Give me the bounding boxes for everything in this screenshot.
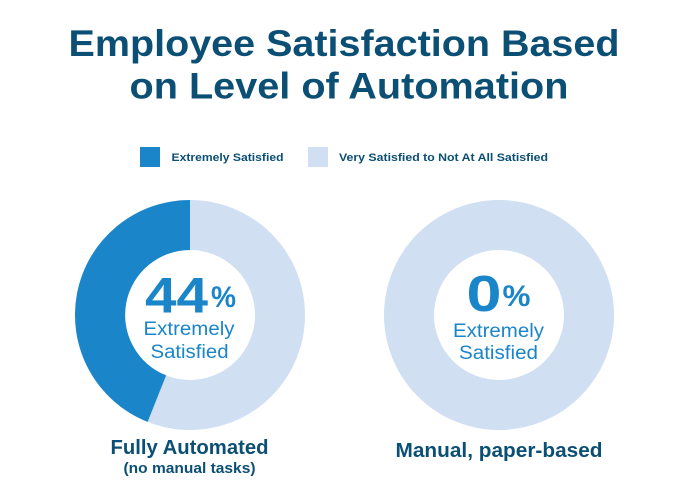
- donut chart: 0 percent: [409, 225, 589, 405]
- legend label: very satisfied to not at all satisfied: Very Satisfied to Not At All Satisfied: [339, 152, 548, 164]
- center label: [144, 319, 235, 363]
- center label: Extremely: [144, 319, 235, 340]
- title: [68, 23, 620, 106]
- value: 44%: 44: [145, 268, 208, 324]
- center label: Satisfied: [459, 343, 538, 364]
- panel: fully automated: [75, 200, 280, 477]
- legend swatch: very satisfied to not at all satisfied: [308, 147, 328, 167]
- legend: [140, 147, 548, 167]
- legend swatch: extremely satisfied: [140, 147, 160, 167]
- value: 0%: %: [502, 280, 530, 313]
- center label: Extremely: [453, 321, 545, 342]
- title: on Level of Automation: [130, 66, 568, 106]
- chart caption: Manual, paper-based: [396, 440, 602, 462]
- value: 0%: [466, 265, 530, 322]
- legend label: extremely satisfied: Extremely Satisfied: [172, 152, 284, 164]
- center label: Satisfied: [150, 342, 228, 363]
- donut chart: 44 percent: [75, 200, 280, 422]
- center label: [453, 321, 545, 364]
- value: 44%: %: [211, 281, 236, 314]
- value: 0%: 0: [466, 265, 502, 322]
- value: 44%: [145, 268, 236, 324]
- chart caption: [110, 437, 268, 477]
- title: Employee Satisfaction Based: [68, 23, 620, 64]
- panel: manual, paper-based: [396, 225, 602, 462]
- chart caption: (no manual tasks): [124, 461, 256, 477]
- chart caption: Fully Automated: [110, 437, 268, 459]
